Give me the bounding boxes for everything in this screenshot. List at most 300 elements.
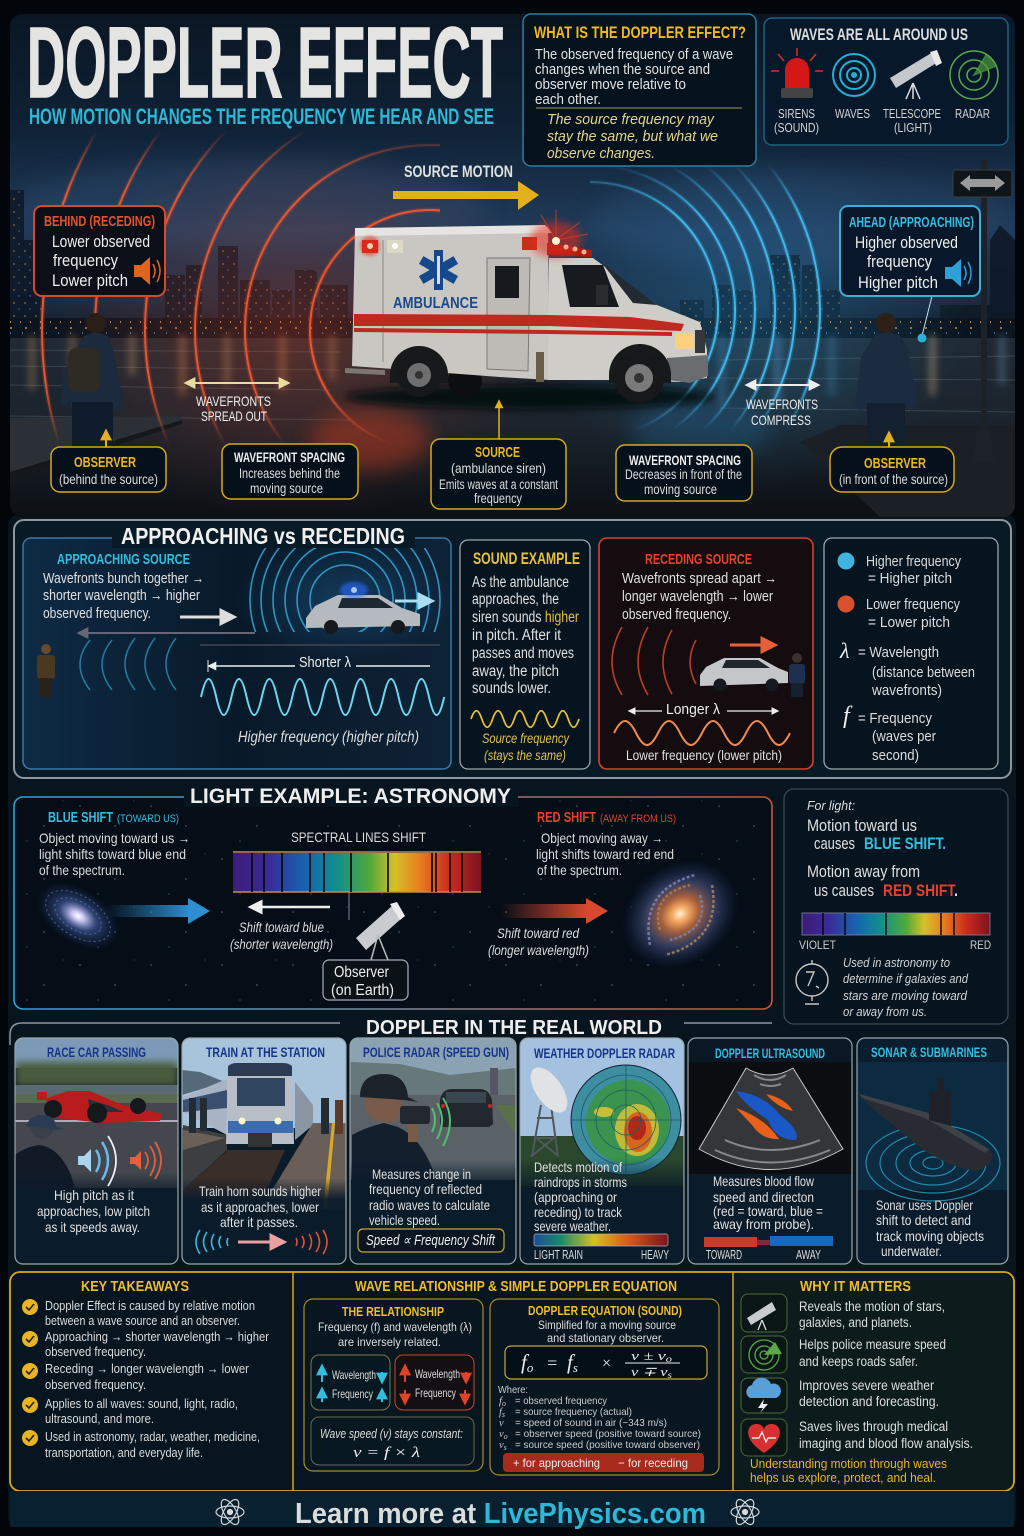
card: train at the station: Train horn sounds higher [199,1183,321,1199]
card: race car passing: RACE CAR PASSING [47,1044,146,1060]
observer figure [37,644,55,697]
panel: sound example [460,540,590,769]
why it matters: Saves lives through medical [799,1419,948,1434]
card: race car passing [15,1038,178,1264]
card: weather doppler radar [520,1038,684,1264]
equation: o [527,1360,534,1375]
label: wavefronts spread out [187,383,287,424]
why it matters: imaging and blood flow analysis. [799,1436,973,1451]
key takeaways: Used in astronomy, radar, weather, medicine, [45,1429,260,1444]
key takeaways: Receding → longer wavelength → lower [45,1361,250,1376]
panel: receding source: RECEDING SOURCE [645,551,752,568]
panel: for light: RED SHIFT. [883,882,958,900]
definitions [498,1385,701,1452]
icon: blue speaker and red speaker [78,1136,161,1186]
panel: what is the doppler effect: changes when the source and [535,62,710,78]
card: sonar and submarines: underwater. [881,1243,942,1259]
panel: legend: = Wavelength [858,644,939,661]
key takeaways: Approaching → shorter wavelength → higher [45,1329,270,1344]
equation: o [666,1354,673,1364]
definitions: o [504,1432,508,1441]
heading: DOPPLER IN THE REAL WORLD [366,1017,662,1039]
why it matters: galaxies, and planets. [799,1315,912,1330]
heading: wave relationship: WAVE RELATIONSHIP & SIMPLE DOPPLER EQUATION [355,1279,677,1295]
red shift text: of the spectrum. [537,862,622,878]
flow scale [704,1236,833,1262]
label: wavefronts spread out: WAVEFRONTS [196,393,271,409]
panel: receding source: Wavefronts spread apart → [622,570,777,587]
blue shift text [39,809,190,878]
sign convention bar [503,1453,704,1472]
wave: lower frequency [614,721,790,745]
caption: shift toward blue [230,919,333,952]
card: weather doppler radar: (approaching or [534,1189,617,1205]
wave: source frequency [471,711,579,727]
card: police radar: frequency of reflected [369,1181,482,1197]
panel: legend: = Frequency [858,710,932,727]
panel: for light: Used in astronomy to [843,955,950,970]
wave arcs toward observer [80,638,176,690]
card: train at the station [182,1038,346,1264]
section: doppler in the real world [10,1017,1008,1264]
panel: doppler equation: Simplified for a moving source [538,1318,676,1332]
icon: gauge [796,960,828,1004]
flow scale: AWAY [796,1248,821,1262]
panel: light example astronomy [14,782,772,1009]
blue shift text: of the spectrum. [39,862,125,878]
equation [505,1346,707,1380]
why it matters: Helps police measure speed [799,1337,946,1352]
flow scale: TOWARD [706,1248,742,1262]
why it matters: Improves severe weather [799,1378,934,1393]
panel: for light: BLUE SHIFT. [864,835,946,853]
definitions: v [499,1429,504,1440]
check icons [22,1299,38,1446]
ambulance label: AMBULANCE [393,295,478,312]
why it matters [741,1279,973,1485]
observer box [323,960,408,1000]
panel: sound example: approaches, the [472,591,559,608]
footer [10,1491,1014,1530]
panel: waves are all around us: WAVES [835,106,870,121]
card: police radar: radio waves to calculate [369,1197,490,1213]
icon: telescope [741,1294,787,1332]
card: weather doppler radar: WEATHER DOPPLER RADAR [534,1045,675,1061]
why it matters: detection and forecasting. [799,1394,939,1409]
callout: wavefront spacing ahead: Decreases in front of the [625,467,742,482]
panel: for light: For light: [807,798,855,813]
arrow: receding motion [730,644,773,646]
callout: behind receding [34,206,165,296]
arrow: red shift [500,898,608,924]
box: wave speed [311,1417,474,1465]
observer behind source [60,313,123,448]
callout: behind receding: Lower observed [52,232,150,251]
definitions: s [502,1410,505,1419]
callout: source [431,402,566,509]
arrow: car motion [395,600,430,602]
title: DOPPLER EFFECT [27,7,503,119]
callout: ahead approaching: Higher pitch [858,273,938,292]
box: approaching arrows [311,1355,390,1410]
panel: legend [824,538,998,769]
panel: receding source [599,538,813,769]
key takeaways: Applies to all waves: sound, light, radio, [45,1396,238,1411]
callout: wavefront spacing behind [222,444,358,499]
why it matters: WHY IT MATTERS [800,1279,911,1295]
panel: legend: λ [839,638,850,663]
equation: = [546,1353,558,1373]
box: wave speed: v = f × λ [353,1445,421,1461]
callout: observer ahead: (in front of the source) [839,471,948,487]
panel: legend: (waves per [872,728,936,745]
callout: observer behind [51,432,166,492]
key takeaways: Doppler Effect is caused by relative motion [45,1298,255,1313]
definitions: Where: [498,1385,528,1396]
definitions: = observer speed (positive toward source) [515,1428,701,1440]
arrow: motion [180,616,232,618]
callout: ahead approaching: frequency [867,252,932,271]
arrow: shift toward blue [252,906,330,908]
galaxy: red [601,837,759,991]
card: doppler ultrasound [688,1038,852,1264]
key takeaways [22,1279,270,1460]
caption: shift toward blue: Shift toward blue [239,919,324,935]
callout: behind receding: frequency [53,251,118,270]
panel: what is the doppler effect: observer move relative to [535,77,686,93]
label: wavefronts spread out: SPREAD OUT [201,408,267,424]
ambulance box body [345,225,552,382]
card: weather doppler radar: receding) to track [534,1204,623,1220]
icon: waves [833,54,875,96]
panel: what is the doppler effect: The source frequency may [547,111,715,128]
key takeaways: transportation, and everyday life. [45,1445,203,1460]
definitions: = observed frequency [515,1395,608,1407]
panel: waves are all around us [764,18,1008,145]
panel: what is the doppler effect: stay the same, but what we [547,128,718,145]
panel: sound example: Source frequency [482,731,570,746]
definitions: v [499,1440,504,1451]
card: sonar and submarines [857,1038,1008,1264]
label: wavefronts compress: COMPRESS [751,412,811,428]
panel: sound example: in pitch. After it [472,627,562,644]
caption: shift toward blue: (shorter wavelength) [230,936,333,952]
card: sonar and submarines: shift to detect and [876,1212,971,1228]
panel: waves are all around us: SIRENS [778,106,815,121]
icon: telescope [356,902,405,960]
panel: legend: = Lower pitch [868,614,950,631]
panel: doppler equation [490,1299,719,1475]
far wheel [448,363,482,397]
panel: sound example: siren sounds higher [472,609,579,626]
shorter wavelength label: Shorter λ [299,654,351,671]
definitions: f [499,1407,502,1418]
box: receding arrows [395,1355,474,1410]
callout: wavefront spacing behind: Increases behind the [239,466,340,481]
icon: speaker low [134,257,160,285]
red shift text [536,809,676,878]
caption: shift toward red: Shift toward red [497,925,580,941]
spectrum legend: VIOLET [799,938,837,952]
panel: waves are all around us: (LIGHT) [894,120,932,135]
emergency lights [360,210,592,258]
callout: source: (ambulance siren) [451,460,546,476]
label: wavefronts compress: WAVEFRONTS [746,396,818,412]
definitions: = source frequency (actual) [515,1406,632,1418]
blue shift text: light shifts toward blue end [39,846,186,862]
galaxy: blue [25,869,131,963]
card: weather doppler radar: severe weather. [534,1218,611,1234]
wheels [390,344,671,403]
card: sonar and submarines: track moving objects [876,1228,984,1244]
heading: approaching vs receding: APPROACHING vs RECEDING [121,523,405,549]
panel: sound example: away, the pitch [472,663,559,680]
panel: approaching source: observed frequency. [43,605,151,622]
equation: v ∓ v [631,1364,660,1379]
definitions: o [502,1399,506,1408]
callout: ahead approaching: AHEAD (APPROACHING) [849,215,974,231]
longer wavelength label: Longer λ [666,701,720,718]
panel: approaching source: Wavefronts bunch together → [43,570,204,587]
callout: wavefront spacing ahead [616,445,752,501]
callout: wavefront spacing behind: WAVEFRONT SPACING [234,449,345,465]
card: sonar and submarines: Sonar uses Doppler [876,1197,973,1213]
icon: atom right [731,1497,759,1527]
caption: shift toward red: (longer wavelength) [488,942,589,958]
icon: heart [741,1419,787,1456]
box: approaching arrows: Wavelength [332,1368,376,1382]
sign convention bar: + for approaching [513,1456,600,1470]
hero panel: ambulance scene [10,14,1015,520]
observer figure [789,653,805,697]
panel: legend: f [843,703,853,729]
card: police radar: vehicle speed. [369,1212,440,1228]
definitions: s [504,1443,507,1452]
panel: legend: Lower frequency [866,596,960,613]
formula box [358,1229,504,1252]
red shift text: RED SHIFT [537,809,596,826]
callout: ahead approaching: Higher observed [855,233,958,252]
spectrum legend [799,913,991,952]
panel: the relationship: THE RELATIONSHIP [342,1304,444,1319]
arrow: source motion [393,181,539,210]
callout: wavefront spacing behind: moving source [250,481,323,496]
icon: atom left [216,1497,244,1527]
red shift text: Object moving away → [541,830,663,846]
panel: for light: causes [814,835,855,853]
red shift text: (AWAY FROM US) [600,813,676,825]
equation: f [567,1350,573,1374]
card: police radar: Measures change in [372,1166,471,1182]
callout: observer ahead [830,434,954,492]
box: approaching arrows: Frequency [332,1387,373,1401]
callout: behind receding: BEHIND (RECEDING) [44,214,155,230]
card: train at the station: after it passes. [220,1214,298,1230]
wave arcs [612,627,696,695]
panel: for light: Motion away from [807,863,920,881]
panel: doppler equation: DOPPLER EQUATION (SOUND) [528,1303,682,1318]
panel: what is the doppler effect: each other. [535,92,601,108]
rain scale [534,1234,669,1262]
observer box: (on Earth) [331,982,394,999]
spectrum legend: RED [970,938,991,952]
observer in front of source [855,313,917,449]
source motion label: SOURCE MOTION [404,162,513,181]
why it matters: Reveals the motion of stars, [799,1299,945,1314]
panel: approaching source: shorter wavelength → higher [43,587,200,604]
star of life [419,250,458,290]
wave and arrow diagram [196,1230,327,1254]
callout: behind receding: Lower pitch [52,271,128,290]
panel: what is the doppler effect: The observed frequency of a wave [535,47,733,63]
panel: approaching source: Higher frequency (higher pitch) [238,729,419,746]
icon: street sign [953,160,1012,462]
label: wavefronts compress [746,385,818,428]
subtitle: HOW MOTION CHANGES THE FREQUENCY WE HEAR AND SEE [29,104,494,129]
card: police radar [350,1038,516,1264]
definitions: v [499,1418,504,1429]
blue shift text: Object moving toward us → [39,830,190,846]
panel: receding source: longer wavelength → lower [622,588,773,605]
panel: waves are all around us: TELESCOPE [883,106,941,121]
blue shift text: BLUE SHIFT [48,809,113,826]
card: doppler ultrasound: DOPPLER ULTRASOUND [715,1045,825,1061]
panel: legend: (distance between [872,664,975,681]
formula box: Speed ∝ Frequency Shift [366,1233,496,1249]
card: doppler ultrasound: away from probe). [713,1216,814,1232]
panel: the relationship: Frequency (f) and wavelength (λ) [318,1320,472,1334]
observer box: Observer [334,964,390,981]
box: wave speed: Wave speed (v) stays constant: [320,1426,463,1441]
callout: wavefront spacing ahead: moving source [644,482,717,497]
icon: speaker high [945,259,971,287]
callout: observer ahead: OBSERVER [864,455,926,472]
panel: for light: us causes [814,882,874,900]
panel: for light: or away from us. [843,1004,927,1019]
panel: sound example: As the ambulance [472,574,569,591]
definitions: = source speed (positive toward observer) [515,1439,700,1451]
heading: LIGHT EXAMPLE: ASTRONOMY [190,785,511,808]
caption: shift toward red [488,925,589,958]
card: race car passing: as it speeds away. [45,1219,140,1235]
panel: sound example: SOUND EXAMPLE [473,549,580,568]
section: bottom panel [10,1272,1014,1491]
panel: legend: wavefronts) [871,682,942,699]
callout: observer behind: (behind the source) [59,471,158,487]
equation: × [601,1355,612,1372]
panel: sound example: sounds lower. [472,680,551,697]
panel: waves are all around us: (SOUND) [774,120,819,135]
panel: doppler equation: and stationary observer. [547,1331,664,1345]
icon: telescope [890,50,942,99]
panel: the relationship: are inversely related. [338,1335,441,1349]
callout: observer behind: OBSERVER [74,454,136,471]
spectral heading: SPECTRAL LINES SHIFT [291,829,426,845]
card: weather doppler radar: Detects motion of [534,1159,622,1175]
wavefront arcs around car [249,548,441,632]
key takeaways: KEY TAKEAWAYS [81,1279,189,1295]
definitions: = speed of sound in air (~343 m/s) [515,1417,667,1429]
card: race car passing: approaches, low pitch [37,1203,150,1219]
red stripe [354,314,684,336]
why it matters: Understanding motion through waves [750,1456,947,1471]
card: police radar: POLICE RADAR (SPEED GUN) [363,1044,509,1060]
why it matters: and keeps roads safer. [799,1354,918,1369]
panel: for light [784,789,1008,1024]
wave: higher frequency [201,679,444,715]
icon: siren [771,48,823,98]
card: doppler ultrasound: (red = toward, blue = [713,1203,823,1219]
icon: radar [950,51,998,99]
callout: source: Emits waves at a constant [439,477,558,492]
red shift text: light shifts toward red end [536,846,674,862]
card: race car passing: High pitch as it [54,1187,134,1203]
callout: source: SOURCE [475,444,520,461]
ambulance cab [548,258,708,383]
panel: legend: Higher frequency [866,553,961,570]
wavefront arcs behind source (red) [40,132,440,443]
panel: what is the doppler effect: observe changes. [547,145,655,162]
spectrum [233,852,481,920]
ambulance [345,210,715,409]
panel: sound example: (stays the same) [484,748,566,763]
card: train at the station: TRAIN AT THE STATION [206,1044,325,1060]
panel: waves are all around us: WAVES ARE ALL AROUND US [790,26,968,44]
panel: for light: determine if galaxies and [843,971,969,986]
car [700,658,788,692]
panel: approaching source [22,537,452,770]
rain scale: HEAVY [641,1248,669,1262]
panel: sound example: passes and moves [472,645,574,662]
why it matters: helps us explore, protect, and heal. [750,1470,936,1485]
wavefront arcs ahead of source (blue) [590,168,822,428]
panel: waves are all around us: RADAR [955,106,990,121]
key takeaways: observed frequency. [45,1377,146,1392]
panel: what is the doppler effect [523,14,756,166]
equation: v ± v [631,1348,656,1363]
definitions: f [499,1396,502,1407]
blue shift text: (TOWARD US) [117,813,179,825]
police car [306,582,420,634]
callout: ahead approaching [840,206,980,342]
panel: legend: = Higher pitch [868,570,952,587]
card: doppler ultrasound: speed and directon [713,1189,814,1205]
card: weather doppler radar: raindrops in storms [534,1174,627,1190]
key takeaways: between a wave source and an observer. [45,1313,240,1328]
equation: f [521,1350,527,1374]
icon: storm [741,1378,787,1413]
footer link text: Learn more at LivePhysics.com [295,1498,706,1530]
equation: s [573,1360,578,1375]
arrow: blue shift [105,898,210,924]
panel: what is the doppler effect: WHAT IS THE DOPPLER EFFECT? [534,23,746,42]
panel: for light: Motion toward us [807,817,917,835]
panel: receding source: observed frequency. [622,606,731,623]
card: doppler ultrasound: Measures blood flow [713,1173,815,1189]
panel: legend: second) [872,747,919,764]
callout: wavefront spacing ahead: WAVEFRONT SPACING [629,452,741,468]
key takeaways: ultrasound, and more. [45,1411,154,1426]
panel: the relationship [304,1299,483,1471]
panel: receding source: Lower frequency (lower pitch) [626,747,782,763]
panel: for light: stars are moving toward [843,988,968,1003]
equation: s [668,1370,673,1380]
callout: source: frequency [474,491,522,506]
rain scale: LIGHT RAIN [534,1248,583,1262]
icon: radar [741,1336,787,1373]
panel: approaching source: APPROACHING SOURCE [57,551,190,568]
key takeaways: observed frequency. [45,1344,146,1359]
